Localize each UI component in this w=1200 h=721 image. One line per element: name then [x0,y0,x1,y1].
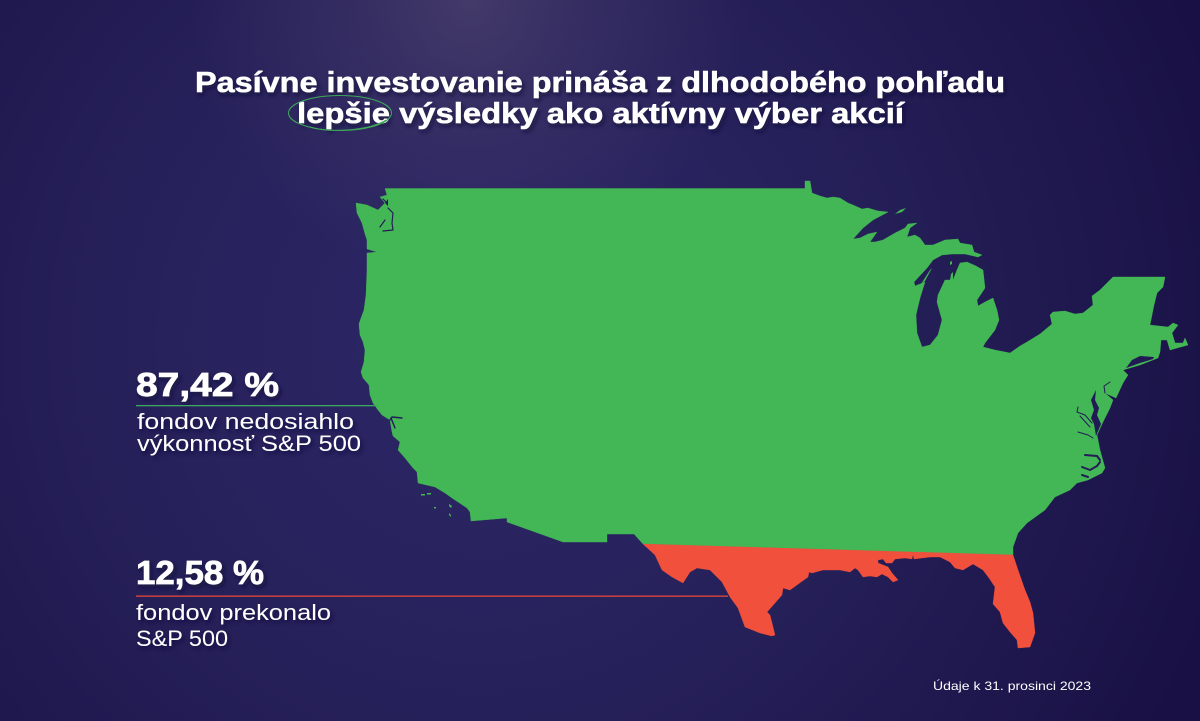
value 12,58 %: 12,58 % [136,554,264,591]
green leader line [136,405,378,406]
map details: coastline inlets and bays [380,199,1110,477]
hand-drawn ellipse around the word lepšie [288,96,392,130]
red leader line [136,596,728,597]
map details: Chesapeake Bay and Long Island Sound [385,199,1154,436]
description: fondov nedosiahlo [137,409,354,434]
map of the United States [356,181,1188,648]
description [137,409,361,456]
map region: red share [643,544,1035,648]
callout: 87,42 % [136,366,378,456]
description [136,600,331,651]
map details: islands and peninsulas [421,208,953,517]
title [195,67,1005,130]
title line 2: lepšie výsledky ako aktívny výber akcií [297,98,905,130]
description: fondov prekonalo [136,600,331,625]
description: S&P 500 [136,626,228,651]
footnote: Údaje k 31. prosinci 2023 [933,678,1091,693]
title line 1: Pasívne investovanie prináša z dlhodobého pohľadu [195,67,1005,99]
map region: green share [356,181,1188,555]
description: výkonnosť S&P 500 [137,431,361,456]
callout: 12,58 % [136,554,728,651]
value 87,42 %: 87,42 % [136,366,279,403]
